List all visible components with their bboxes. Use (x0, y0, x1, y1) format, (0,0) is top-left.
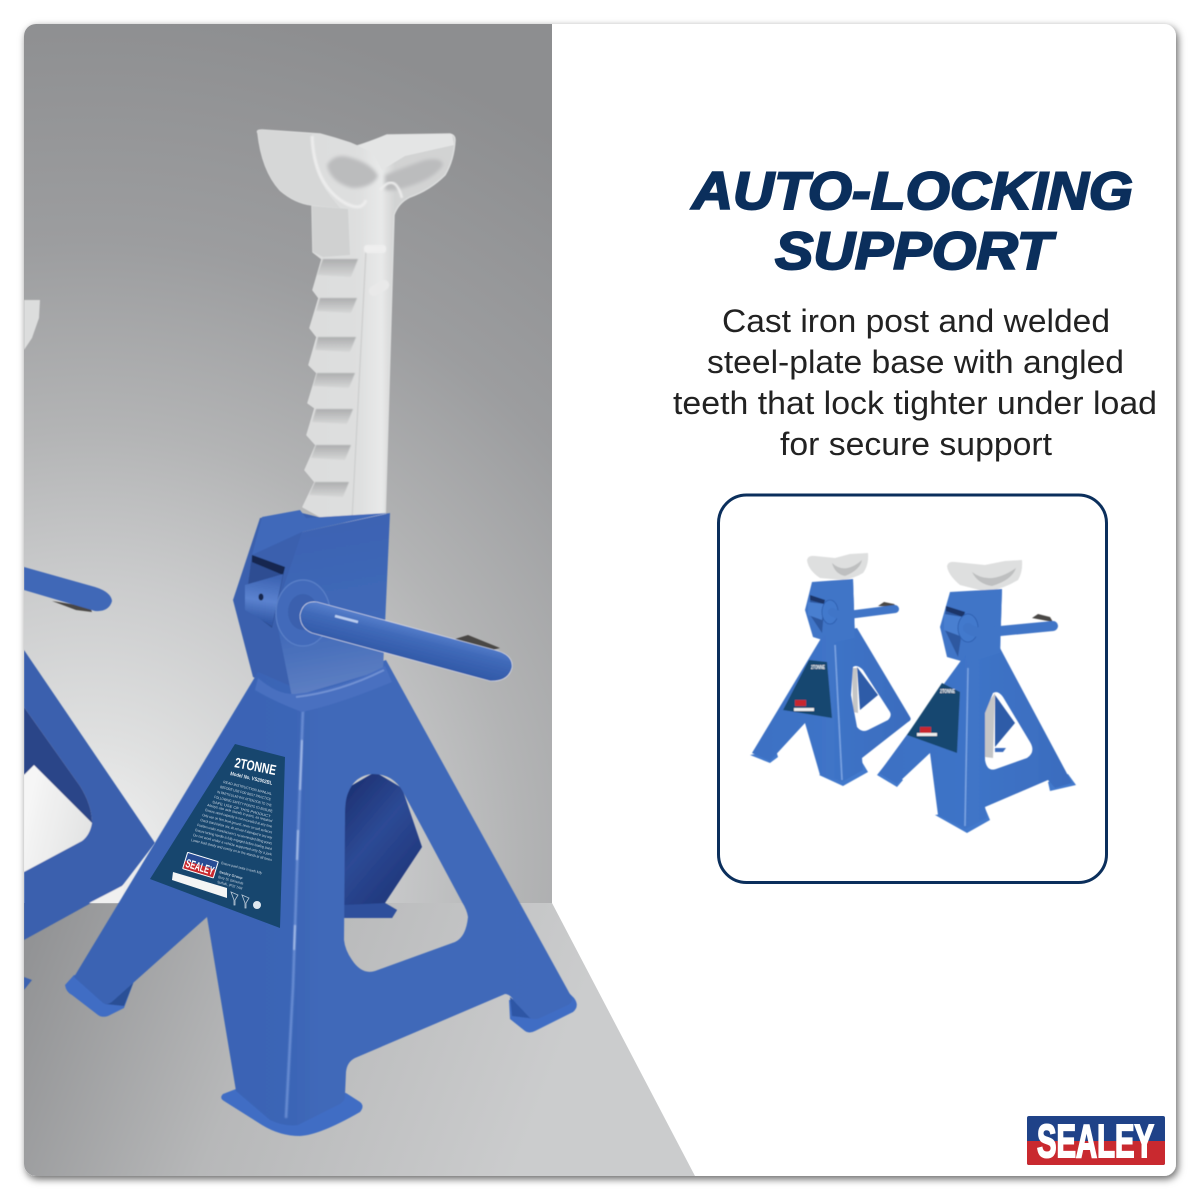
safety text: BEFORE USE FOR BEST PRACTICE (220, 785, 272, 802)
background jack stand (cropped) (24, 300, 155, 990)
heading: SUPPORT (775, 222, 1057, 281)
ratchet post and saddle (258, 130, 455, 522)
safety text: Only use on firm level ground, never on soft surfaces (202, 813, 273, 834)
description text: Cast iron post and welded (722, 303, 1110, 339)
ridge highlight (286, 708, 303, 1118)
safety text: Bury St. Edmunds (218, 875, 244, 886)
safety text: IN PARTICULAR PAY ATTENTION TO THE (217, 790, 273, 808)
label heading: 2TONNE (233, 754, 278, 778)
inset box: pair of jack stands (718, 495, 1106, 882)
safety text: Check stand before use, do not use if damaged in any way (200, 818, 273, 840)
foot plates (65, 975, 134, 1017)
safety text: Position under manufacturer's recommended lifting points (197, 823, 273, 846)
panel: photo (24, 24, 695, 1176)
safety text: Ensure rated capacity is not exceeded at any time (205, 808, 273, 829)
model number: Model No. VS2002BL (230, 771, 273, 787)
safety text: Always use axle stands in pairs, as required (207, 803, 273, 823)
safety text: READ INSTRUCTION MANUAL (223, 780, 272, 796)
wall backdrop (24, 24, 552, 904)
head front plate (275, 513, 390, 697)
flange (276, 580, 330, 646)
safety text: Sealey Group (219, 870, 244, 880)
small label (907, 683, 960, 753)
description text (673, 303, 1157, 462)
teeth (309, 259, 358, 497)
safety text: Lower load slowly and evenly on to the stands at all times (191, 838, 272, 862)
heading (690, 162, 1133, 281)
label logo: SEALEY (184, 856, 216, 878)
handle (300, 602, 512, 681)
small label (783, 660, 832, 718)
safety text: SAFE USE OF THIS PRODUCT (212, 800, 272, 819)
description text: steel-plate base with angled (707, 344, 1124, 380)
label icons (231, 892, 261, 909)
heading: AUTO-LOCKING (690, 162, 1133, 221)
description text: for secure support (780, 426, 1052, 462)
body with legs (74, 660, 572, 1125)
safety text (191, 780, 273, 891)
head opening (245, 555, 285, 628)
small jack stand left: 2TONNE (811, 665, 825, 671)
product label (150, 744, 285, 928)
description text: teeth that lock tighter under load (673, 385, 1157, 421)
safety text: Suffolk, IP32 7AR (217, 880, 243, 891)
safety text: Ensure locking handle is fully engaged before loading stand (195, 828, 272, 851)
main jack stand (65, 130, 577, 1136)
label serial box (172, 872, 227, 898)
safety text: Ensure pawl seats in teeth fully (221, 861, 263, 875)
inner rear leg seen through window (344, 772, 422, 918)
weld seam (255, 666, 392, 712)
small jack stand left (750, 553, 911, 786)
pivot pin (245, 574, 283, 626)
label logo (182, 852, 219, 879)
safety text: FOLLOWING SAFETY POINTS TO ENSURE (214, 795, 273, 814)
head: rear plate (232, 512, 319, 686)
handle grip (455, 635, 500, 651)
small jack stand right (877, 560, 1076, 833)
safety text: Do not work under a vehicle supported only by a jack (193, 833, 272, 857)
small jack stand right: 2TONNE (940, 689, 955, 695)
floor (24, 903, 695, 1176)
